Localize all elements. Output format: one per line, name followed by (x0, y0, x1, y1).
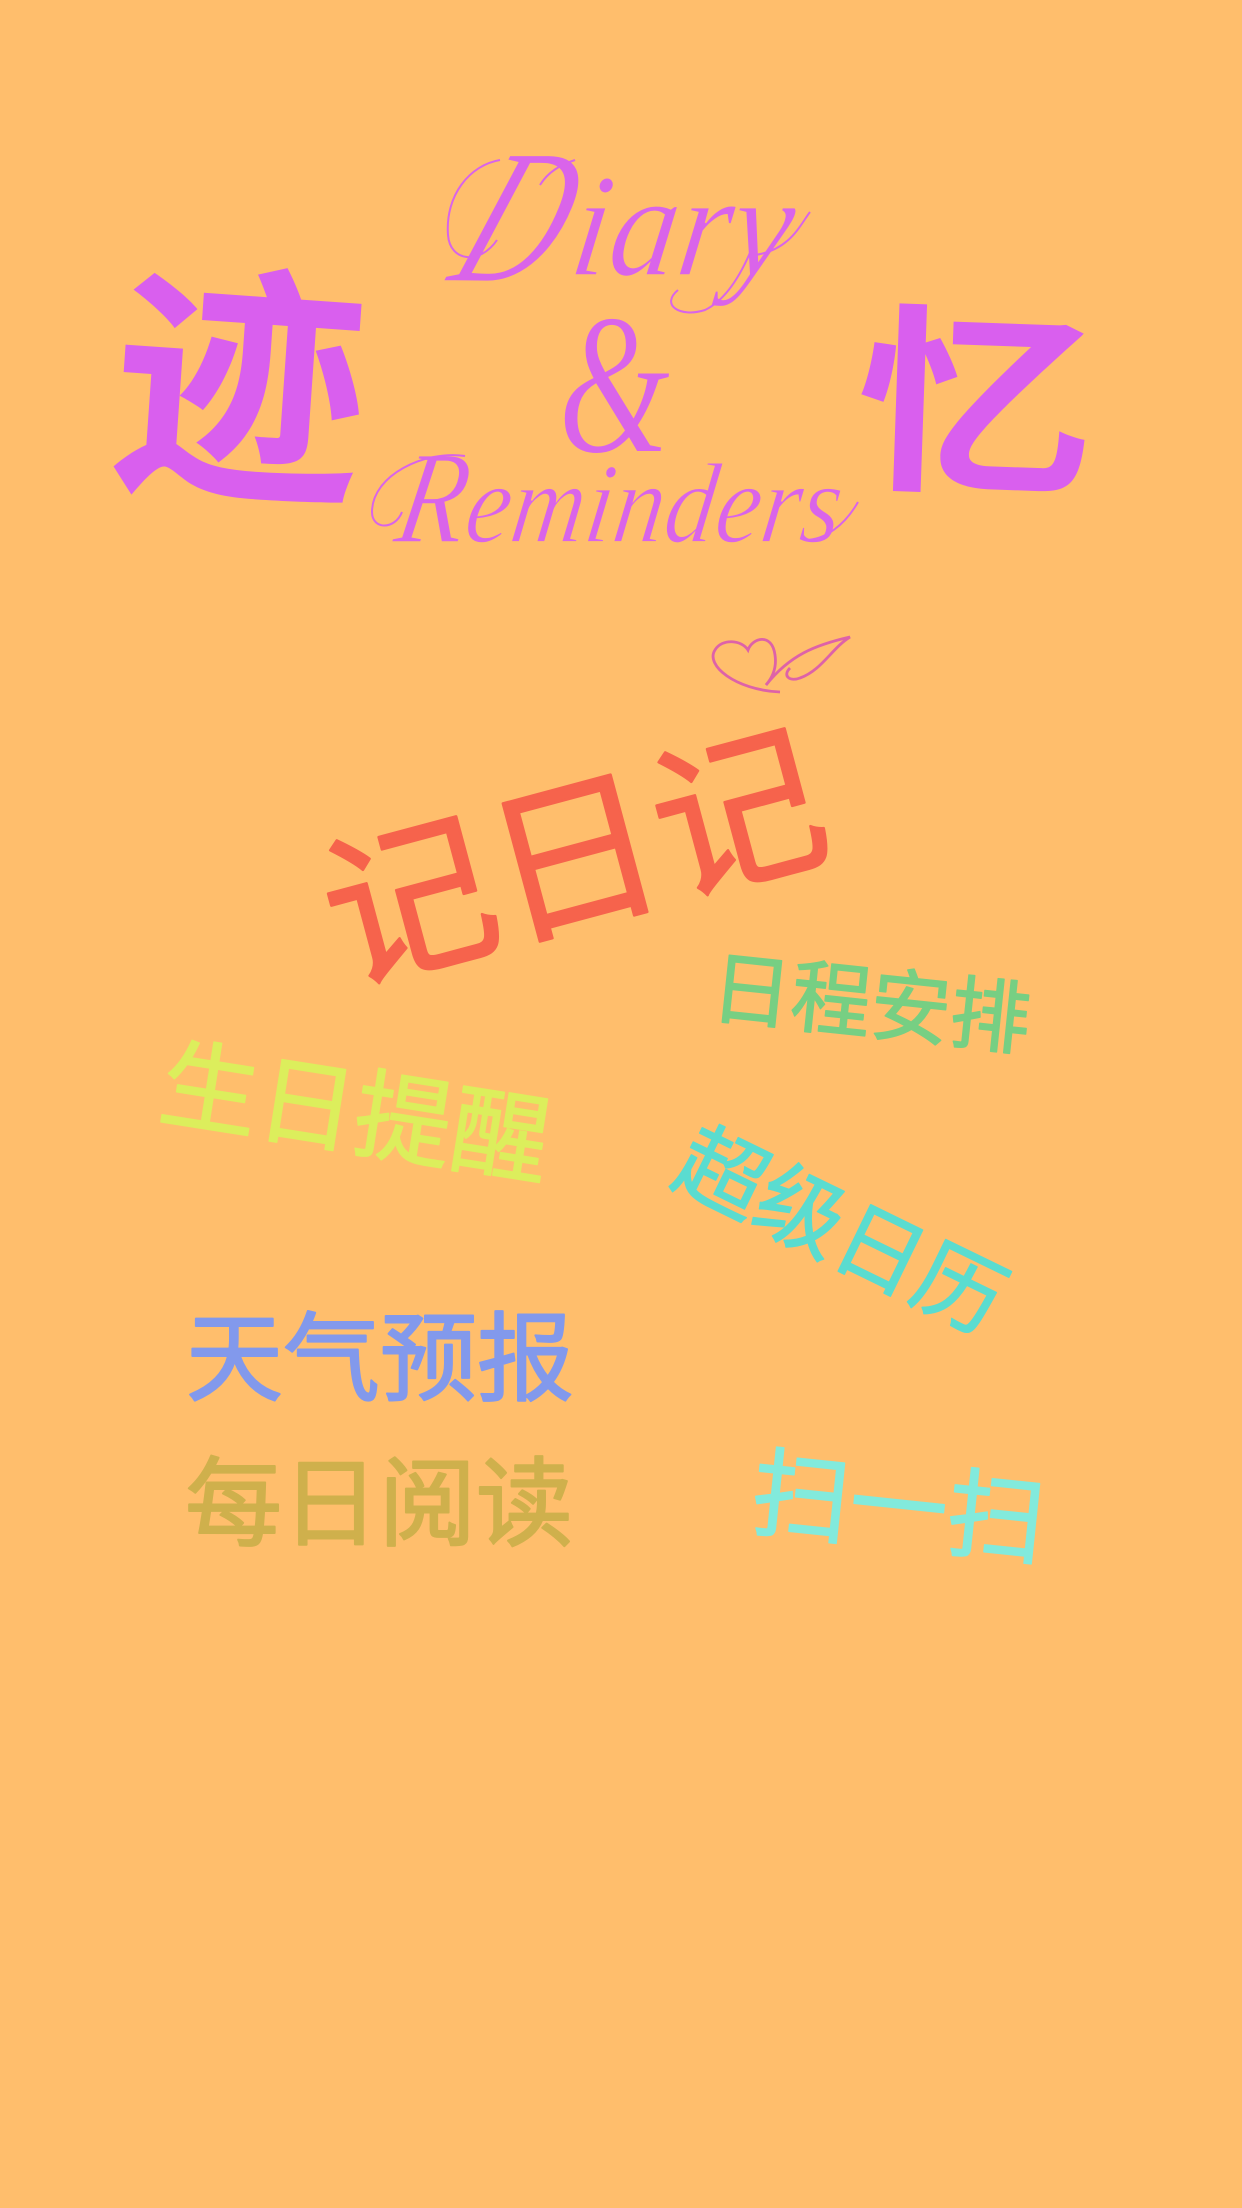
feature: 天气预报: 天气预报 (186, 1305, 574, 1414)
feature: 每日阅读: 每日阅读 (185, 1450, 573, 1559)
english title: Diary: iary (563, 144, 806, 307)
feature: 扫一扫: 扫一扫 (747, 1438, 1051, 1578)
feature: 超级日历: 超级日历 (660, 1110, 1020, 1353)
title logo: 迹: 迹 (102, 246, 376, 541)
icon: heart and leaf (713, 637, 850, 692)
feature: 日程安排: 日程安排 (707, 944, 1035, 1066)
title logo: 忆: 忆 (853, 291, 1098, 523)
english title: Diary (426, 111, 810, 324)
english title: ampersand: & (558, 273, 670, 496)
feature: 记日记: 记日记 (304, 702, 846, 1018)
english title: Reminders: R (386, 425, 481, 571)
feature: 生日提醒: 生日提醒 (153, 1028, 558, 1198)
english title: Reminders: eminders (458, 440, 851, 567)
english title: Diary: D (426, 111, 614, 324)
